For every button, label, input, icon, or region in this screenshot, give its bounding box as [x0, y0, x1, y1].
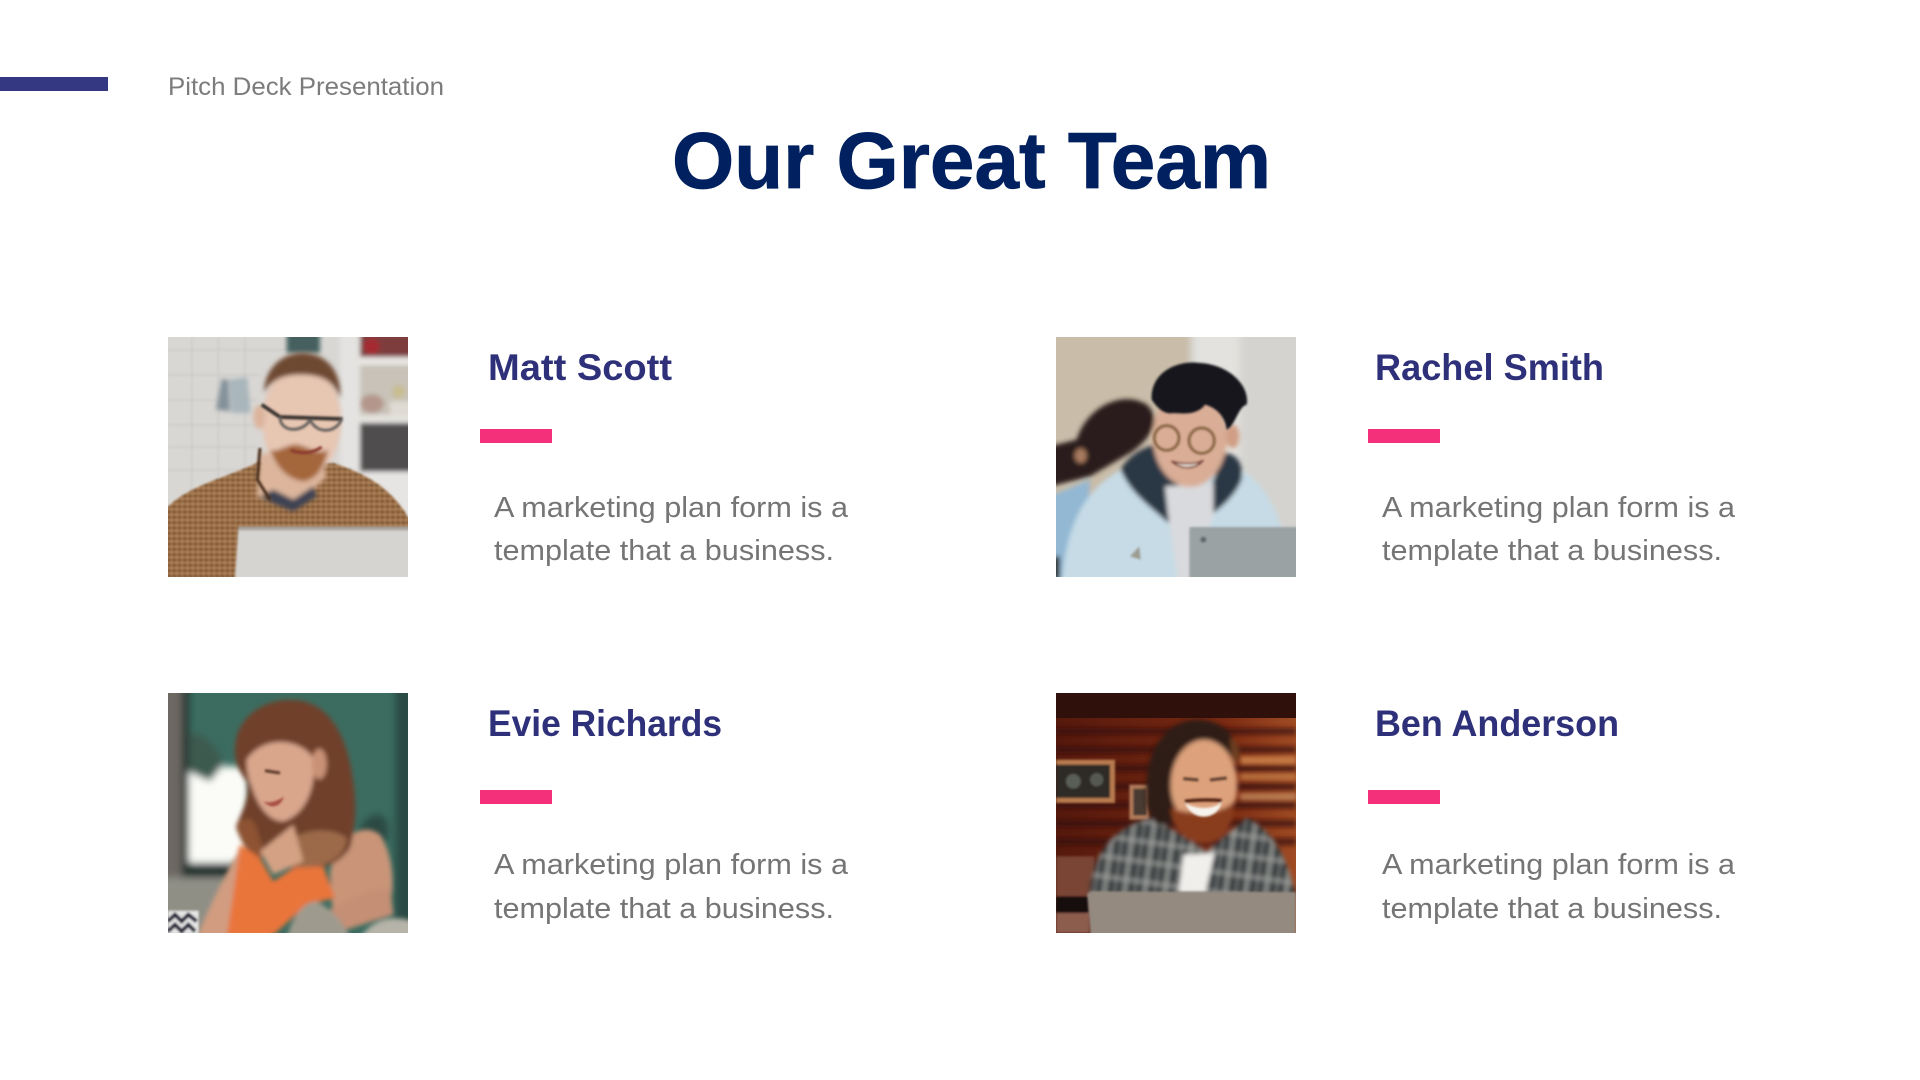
photo: Rachel Smith	[1056, 337, 1296, 577]
description	[1382, 492, 1736, 567]
photo: Matt Scott	[168, 337, 408, 577]
description: template that a business.	[1382, 893, 1722, 925]
pink divider	[480, 790, 552, 804]
name: Rachel Smith	[1375, 347, 1604, 388]
title: Our Great Team	[672, 116, 1271, 205]
photo: Evie Richards	[168, 693, 408, 933]
name: Evie Richards	[488, 703, 722, 744]
description: A marketing plan form is a	[494, 849, 849, 881]
description: template that a business.	[494, 893, 834, 925]
pink divider	[1368, 790, 1440, 804]
pink divider	[480, 429, 552, 443]
description: A marketing plan form is a	[494, 492, 849, 524]
description	[494, 492, 849, 567]
name: Ben Anderson	[1375, 703, 1619, 744]
name: Matt Scott	[488, 347, 672, 388]
deck label: Pitch Deck Presentation	[168, 73, 444, 101]
accent bar	[0, 77, 108, 91]
description	[494, 849, 849, 925]
panel: Rachel Smith	[1050, 330, 1736, 584]
panel: Evie Richards	[160, 685, 849, 938]
description	[1382, 849, 1736, 925]
pink divider	[1368, 429, 1440, 443]
panel: Ben Anderson	[1056, 693, 1736, 938]
photo: Ben Anderson	[1056, 693, 1296, 933]
description: A marketing plan form is a	[1382, 492, 1736, 524]
description: template that a business.	[494, 535, 834, 567]
description: A marketing plan form is a	[1382, 849, 1736, 881]
description: template that a business.	[1382, 535, 1722, 567]
panel: Matt Scott	[160, 330, 849, 583]
